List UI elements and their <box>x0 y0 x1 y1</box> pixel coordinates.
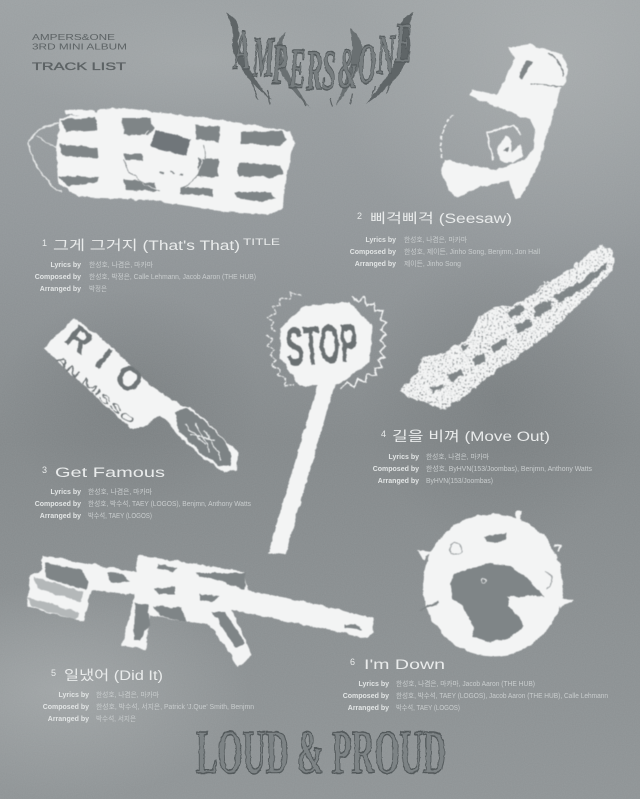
track 1 text: 박정은 <box>89 284 108 293</box>
track 3 illustration: knife: AN MISSO <box>53 354 136 428</box>
album title: loud and proud: LOUD & PROUD <box>196 717 446 787</box>
track 5 text <box>43 668 254 723</box>
track 4 text: 4 <box>381 429 386 439</box>
track 1 text: 한성호, 나겸은, 마카마 <box>89 260 154 269</box>
track 6 text: Composed by <box>343 693 389 700</box>
album header: TRACK LIST <box>32 61 126 73</box>
track 5 text: Composed by <box>43 704 89 711</box>
track 2 text: 제이든, Jinho Song <box>404 259 461 268</box>
track 2 text: 한성호, 나겸은, 마카마 <box>404 235 468 244</box>
track 4 text: 한성호, ByHVN(153/Joombas), Benjmn, Anthony Watts <box>426 464 592 473</box>
track 3 text: Lyrics by <box>51 489 81 496</box>
track 4 text: 한성호, 나겸은, 마카마 <box>426 452 490 461</box>
track 6 text: 6 <box>350 657 355 667</box>
track 4 text: Arranged by <box>378 478 419 485</box>
illustration: dynamite bomb <box>29 108 295 215</box>
track 2 text: 2 <box>357 211 362 221</box>
track 3 text: Get Famous <box>55 465 165 480</box>
band logo: AMPERS&ONE <box>232 10 412 103</box>
track 2 text: Composed by <box>350 249 396 256</box>
track 3 text: 박수석, TAEY (LOGOS) <box>88 511 152 520</box>
album header <box>32 33 127 73</box>
track 5 text: 일냈어 (Did It) <box>64 668 163 683</box>
track 1 text: 그게 그거지 (That's That) <box>53 238 240 253</box>
track 2 text: Lyrics by <box>366 237 396 244</box>
track 3 text: Composed by <box>35 501 81 508</box>
track 6 text: 한성호, 박수석, TAEY (LOGOS), Jacob Aaron (THE HUB), Calle Lehmann <box>396 691 608 700</box>
track 6 text: 박수석, TAEY (LOGOS) <box>396 703 460 712</box>
track 5 text: 5 <box>51 668 56 678</box>
track 6 text: Arranged by <box>348 705 389 712</box>
track 2 text <box>350 211 540 268</box>
album header: 3RD MINI ALBUM <box>32 42 127 52</box>
track 4 text: Composed by <box>373 466 419 473</box>
track 6 text: I'm Down <box>364 657 445 672</box>
track 1 text: 1 <box>42 238 47 248</box>
track 6 text: Lyrics by <box>359 681 389 688</box>
track 3 text <box>35 465 251 520</box>
track 2 text: 한성호, 제이든, Jinho Song, Benjmn, Jon Hall <box>404 247 540 256</box>
track 1 text: 한성호, 박정은, Calle Lehmann, Jacob Aaron (THE HUB) <box>89 272 256 281</box>
track 1 text <box>35 237 280 293</box>
track 4 text: ByHVN(153/Joombas) <box>426 478 493 485</box>
illustration: ship <box>399 245 614 410</box>
track 1 text: Arranged by <box>40 286 81 293</box>
track 5 text: 한성호, 나겸은, 마카마 <box>96 690 160 699</box>
illustration: rifle <box>27 555 374 667</box>
track 3 text: 3 <box>42 465 47 475</box>
track 1 text: Composed by <box>35 274 81 281</box>
track 5 text: 한성호, 박수석, 서지은, Patrick 'J.Que' Smith, Benjmn <box>96 702 254 711</box>
track 5 text: Arranged by <box>48 716 89 723</box>
track 4 text: 길을 비껴 (Move Out) <box>392 429 550 444</box>
track 6 text: 한성호, 나겸은, 마카마, Jacob Aaron (THE HUB) <box>396 679 535 688</box>
track 2 text: 삐걱삐걱 (Seesaw) <box>370 211 512 226</box>
track 1 text: Lyrics by <box>51 262 81 269</box>
track 1 text: TITLE <box>243 237 280 247</box>
track 5 text: Lyrics by <box>59 692 89 699</box>
track 3 text: Arranged by <box>40 513 81 520</box>
illustration: spiked ball <box>417 511 574 656</box>
track 5 text: 박수석, 서지은 <box>96 714 137 723</box>
illustration: grenade <box>440 44 568 199</box>
track 6 text <box>343 657 608 712</box>
track 3 illustration: knife: RIO <box>59 317 151 401</box>
track 4 text <box>373 429 592 485</box>
track 3 text: 한성호, 나겸은, 마카마 <box>88 487 153 496</box>
track 3 text: 한성호, 박수석, TAEY (LOGOS), Benjmn, Anthony Watts <box>88 499 251 508</box>
track 2 text: Arranged by <box>355 261 396 268</box>
album header: AMPERS&ONE <box>32 33 115 42</box>
illustration: stop sign: STOP <box>284 314 360 378</box>
track 3 illustration: knife <box>43 317 238 473</box>
illustration: stop sign <box>267 292 386 555</box>
track 4 text: Lyrics by <box>389 454 419 461</box>
